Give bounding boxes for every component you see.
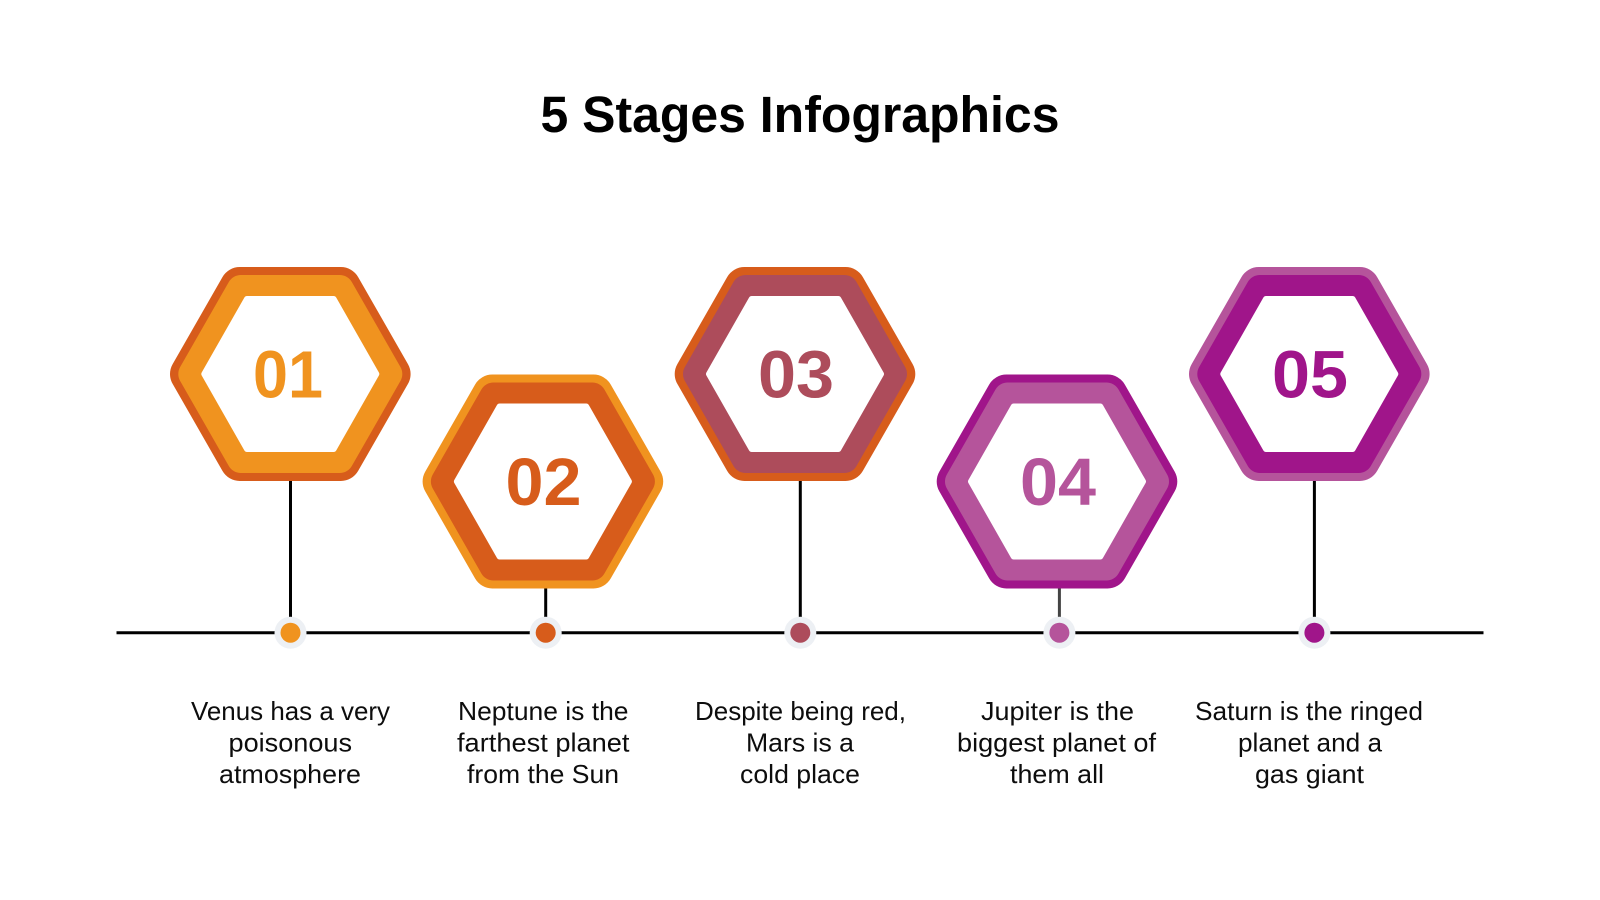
number 05: 05	[1272, 338, 1348, 412]
description 2	[457, 696, 630, 789]
hexagon 5	[1209, 287, 1410, 461]
number 03: 03	[758, 338, 834, 412]
hexagon 1	[190, 287, 391, 461]
stage 2	[443, 394, 643, 789]
description 2: farthest planet	[457, 728, 630, 758]
stage 4	[957, 394, 1157, 789]
title: 5 Stages Infographics	[540, 86, 1060, 143]
description 2: from the Sun	[467, 759, 619, 789]
description 1: poisonous	[228, 728, 352, 758]
description 3: Despite being red,	[695, 696, 906, 726]
stage 5	[1195, 287, 1423, 789]
number 02: 02	[506, 445, 582, 520]
description 5: Saturn is the ringed	[1195, 696, 1423, 726]
description 5: planet and a	[1238, 728, 1383, 758]
description 5	[1195, 696, 1423, 789]
description 4: biggest planet of	[957, 728, 1157, 758]
hexagon 4	[957, 394, 1157, 568]
description 4: Jupiter is the	[981, 696, 1134, 726]
number 01: 01	[253, 338, 323, 412]
hexagon 2	[443, 394, 643, 568]
stage 3	[695, 287, 906, 789]
timeline marker 2	[530, 617, 562, 649]
connector 3	[799, 480, 802, 620]
timeline marker 5	[1298, 617, 1330, 649]
stage 1	[190, 287, 391, 789]
description 4	[957, 696, 1157, 789]
description 2: Neptune is the	[458, 696, 628, 726]
description 3	[695, 696, 906, 789]
connector 4	[1058, 588, 1061, 620]
hexagon 3	[695, 287, 895, 461]
timeline marker 4	[1043, 617, 1075, 649]
description 1: Venus has a very	[191, 696, 390, 726]
connector 2	[544, 588, 547, 620]
connector 5	[1313, 480, 1316, 620]
description 4: them all	[1010, 759, 1104, 789]
description 3: cold place	[740, 759, 860, 789]
description 1: atmosphere	[219, 759, 361, 789]
number 04: 04	[1020, 445, 1096, 520]
connector 1	[289, 480, 292, 620]
timeline axis	[116, 631, 1484, 634]
description 3: Mars is a	[746, 728, 855, 758]
timeline marker 1	[274, 617, 306, 649]
description 1	[191, 696, 390, 789]
description 5: gas giant	[1255, 759, 1365, 789]
timeline marker 3	[784, 617, 816, 649]
